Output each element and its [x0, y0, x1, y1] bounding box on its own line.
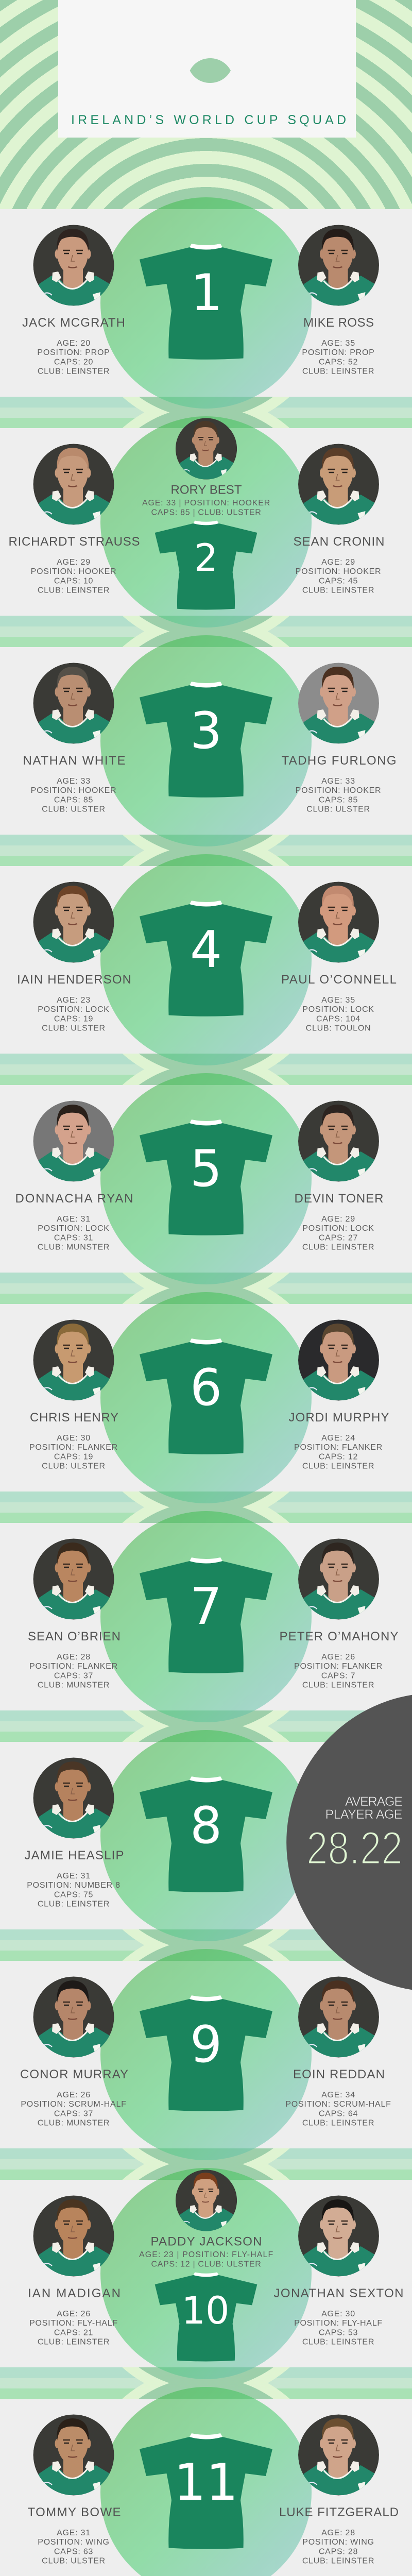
shirt — [140, 1557, 272, 1673]
player: Tommy Bowe: TOMMY BOWE — [28, 2505, 121, 2519]
player: Ian Madigan: POSITION: FLY-HALF — [29, 2319, 118, 2328]
shirt number: 5 — [190, 1140, 222, 1198]
player: Peter O'Mahony: CLUB: LEINSTER — [302, 1681, 374, 1690]
player: Conor Murray: AGE: 26 — [57, 2091, 91, 2099]
player: Richardt Strauss: AGE: 29 — [57, 558, 91, 567]
player: Rory Best: CAPS: 85 | CLUB: ULSTER — [151, 508, 262, 517]
portrait: Mike Ross — [298, 225, 379, 306]
row 6: shirt 6 — [29, 1292, 389, 1503]
player: Donnacha Ryan — [15, 1192, 133, 1252]
player: Luke Fitzgerald: LUKE FITZGERALD — [279, 2505, 399, 2519]
player: Paul O'Connell: CAPS: 104 — [316, 1015, 360, 1023]
player: Chris Henry: AGE: 30 — [57, 1434, 91, 1443]
player: Jack McGrath: CAPS: 20 — [54, 358, 93, 367]
player: Rory Best — [142, 483, 270, 517]
player: Nathan White — [23, 754, 126, 814]
player: Paddy Jackson — [139, 2235, 273, 2269]
portrait: Conor Murray — [33, 1976, 114, 2058]
player: Tommy Bowe: CAPS: 63 — [54, 2547, 93, 2556]
player: Sean O'Brien: CAPS: 37 — [54, 1671, 93, 1681]
player: Jamie Heaslip: JAMIE HEASLIP — [25, 1849, 124, 1862]
player: Jordi Murphy: AGE: 24 — [321, 1434, 355, 1443]
player: Nathan White: CLUB: ULSTER — [42, 805, 106, 814]
player: Tadhg Furlong: TADHG FURLONG — [281, 754, 397, 768]
portrait: Iain Henderson — [33, 882, 114, 962]
player: Luke Fitzgerald: CAPS: 28 — [319, 2547, 358, 2556]
player: Ian Madigan: CLUB: LEINSTER — [38, 2338, 110, 2346]
shirt number: 9 — [190, 2015, 222, 2074]
player: Jordi Murphy: CAPS: 12 — [319, 1453, 358, 1461]
player: Sean Cronin: SEAN CRONIN — [294, 535, 384, 549]
shirt number: 7 — [190, 1578, 222, 1636]
player: Mike Ross — [302, 316, 375, 376]
player: Conor Murray: POSITION: SCRUM-HALF — [21, 2100, 127, 2109]
portrait: Luke Fitzgerald — [298, 2414, 379, 2496]
portrait: Jamie Heaslip — [33, 1758, 114, 1838]
player: Jamie Heaslip: POSITION: NUMBER 8 — [27, 1881, 121, 1890]
player: Tadhg Furlong: POSITION: HOOKER — [296, 786, 381, 795]
player: Nathan White: AGE: 33 — [57, 777, 91, 786]
row 7: shirt 7 — [28, 1511, 399, 1722]
row 10: shirt 10 — [28, 2168, 404, 2379]
player: Ian Madigan: IAN MADIGAN — [28, 2286, 121, 2300]
player: Paddy Jackson: PADDY JACKSON — [150, 2235, 262, 2248]
portrait: Chris Henry — [33, 1320, 114, 1400]
portrait: Paddy Jackson — [176, 2170, 237, 2231]
player: Tadhg Furlong: CAPS: 85 — [319, 795, 358, 805]
shirt — [140, 1776, 272, 1892]
player: Iain Henderson: POSITION: LOCK — [38, 1005, 110, 1014]
shirt circle — [100, 1073, 312, 1284]
title: IRELAND’S WORLD CUP SQUAD — [71, 113, 346, 127]
player: Conor Murray: CLUB: MUNSTER — [38, 2119, 110, 2128]
player: Jamie Heaslip: CLUB: LEINSTER — [38, 1900, 110, 1908]
player: Jordi Murphy — [288, 1411, 389, 1470]
player: Luke Fitzgerald: AGE: 28 — [321, 2529, 355, 2537]
player: Jamie Heaslip: CAPS: 75 — [54, 1891, 93, 1899]
player: Jordi Murphy: CLUB: LEINSTER — [302, 1462, 374, 1470]
player: Luke Fitzgerald: POSITION: WING — [302, 2538, 374, 2547]
player: Eoin Reddan: CAPS: 64 — [319, 2109, 358, 2119]
player: Iain Henderson: IAIN HENDERSON — [17, 973, 131, 987]
player: Jordi Murphy: POSITION: FLANKER — [294, 1443, 383, 1452]
player: Chris Henry: CHRIS HENRY — [30, 1411, 118, 1425]
shirt number: 2 — [194, 536, 218, 580]
player: Paul O'Connell: CLUB: TOULON — [306, 1024, 371, 1032]
portrait: Peter O'Mahony — [298, 1538, 379, 1620]
shirt circle — [100, 197, 312, 409]
shirt circle — [100, 1292, 312, 1503]
shirt — [140, 682, 272, 798]
player: Donnacha Ryan: CAPS: 31 — [54, 1233, 93, 1243]
player: Sean O'Brien: AGE: 28 — [57, 1653, 91, 1662]
shirt — [155, 2272, 257, 2362]
shirt circle — [100, 416, 312, 628]
portrait: Donnacha Ryan — [33, 1100, 114, 1182]
shirt — [140, 2433, 272, 2549]
shirt number: 1 — [191, 264, 222, 323]
player: Paul O'Connell: POSITION: LOCK — [302, 1005, 374, 1014]
player: Richardt Strauss: RICHARDT STRAUSS — [8, 535, 140, 549]
player: Ian Madigan: CAPS: 21 — [54, 2329, 93, 2337]
player: Donnacha Ryan: AGE: 31 — [57, 1215, 91, 1224]
player: Ian Madigan: AGE: 26 — [57, 2310, 91, 2318]
player: Paddy Jackson: CAPS: 12 | CLUB: ULSTER — [151, 2260, 262, 2269]
row 4: shirt 4 — [17, 854, 397, 1065]
shirt circle — [100, 2168, 312, 2379]
player: Sean O'Brien — [28, 1630, 121, 1690]
portrait: Jordi Murphy — [298, 1320, 379, 1400]
player: Mike Ross: CAPS: 52 — [319, 358, 358, 367]
player: Nathan White: CAPS: 85 — [54, 795, 93, 805]
player: Devin Toner: CLUB: LEINSTER — [302, 1243, 374, 1252]
row 9: shirt 9 — [20, 1949, 391, 2160]
player: Tadhg Furlong — [281, 754, 397, 814]
player: Conor Murray: CONOR MURRAY — [20, 2067, 128, 2081]
player: Chris Henry — [29, 1411, 118, 1470]
player: Tadhg Furlong: CLUB: ULSTER — [306, 805, 370, 814]
player: Jack McGrath: POSITION: PROP — [37, 348, 110, 357]
title panel — [58, 0, 356, 138]
shirt — [140, 244, 272, 360]
player: Sean O'Brien: SEAN O’BRIEN — [28, 1630, 121, 1643]
portrait: Eoin Reddan — [298, 1976, 379, 2058]
player: Sean Cronin — [294, 535, 384, 595]
player: Mike Ross: MIKE ROSS — [303, 316, 374, 330]
shirt number: 4 — [190, 921, 222, 979]
portrait: Sean Cronin — [298, 444, 379, 524]
portrait: Jack McGrath — [33, 225, 114, 306]
player: Iain Henderson: AGE: 23 — [57, 996, 91, 1005]
player: Mike Ross: CLUB: LEINSTER — [302, 367, 374, 376]
player: Jamie Heaslip: AGE: 31 — [57, 1872, 91, 1880]
player: Jordi Murphy: JORDI MURPHY — [288, 1411, 389, 1425]
shirt number: 11 — [174, 2453, 238, 2512]
player: Mike Ross: POSITION: PROP — [302, 348, 375, 357]
player: Jonathan Sexton: CLUB: LEINSTER — [302, 2338, 374, 2346]
shirt number: 6 — [190, 1359, 222, 1417]
player: Tommy Bowe: CLUB: ULSTER — [42, 2556, 106, 2566]
portrait: Richardt Strauss — [33, 444, 114, 524]
player: Tommy Bowe: AGE: 31 — [57, 2529, 91, 2537]
player: Eoin Reddan: AGE: 34 — [321, 2091, 355, 2099]
player: Conor Murray — [20, 2067, 128, 2128]
shirt number: 10 — [182, 2289, 229, 2333]
player: Peter O'Mahony: CAPS: 7 — [321, 1671, 355, 1681]
player: Devin Toner: POSITION: LOCK — [302, 1224, 374, 1233]
row 1: shirt 1 — [22, 197, 379, 409]
row 2: shirt 2 — [8, 416, 384, 628]
player: Jonathan Sexton: POSITION: FLY-HALF — [294, 2319, 383, 2328]
player: Donnacha Ryan: CLUB: MUNSTER — [38, 1243, 110, 1252]
player: Jonathan Sexton — [274, 2286, 404, 2346]
player: Sean Cronin: CLUB: LEINSTER — [302, 586, 374, 595]
player: Devin Toner: DEVIN TONER — [295, 1192, 383, 1206]
player: Peter O'Mahony: AGE: 26 — [321, 1653, 355, 1662]
portrait: Paul O'Connell — [298, 882, 379, 962]
player: Eoin Reddan: CLUB: LEINSTER — [302, 2119, 374, 2128]
portrait: Jonathan Sexton — [298, 2196, 379, 2276]
portrait: Tommy Bowe — [33, 2414, 114, 2496]
player: Devin Toner: CAPS: 27 — [319, 1233, 358, 1243]
player: Sean Cronin: POSITION: HOOKER — [296, 567, 381, 576]
player: Eoin Reddan: EOIN REDDAN — [293, 2067, 385, 2081]
player: Paul O'Connell — [281, 973, 397, 1032]
top concentric rings background — [0, 0, 412, 209]
shirt circle — [100, 635, 312, 846]
row 3: shirt 3 — [23, 635, 397, 846]
player: Jonathan Sexton: CAPS: 53 — [319, 2329, 358, 2337]
player: Mike Ross: AGE: 35 — [321, 339, 355, 348]
player: Rory Best: RORY BEST — [171, 483, 242, 497]
player: Sean O'Brien: CLUB: MUNSTER — [38, 1681, 110, 1690]
shirt — [155, 520, 257, 610]
player: Conor Murray: CAPS: 37 — [54, 2109, 93, 2119]
player: Ian Madigan — [28, 2286, 121, 2346]
player: Paul O'Connell: PAUL O’CONNELL — [281, 973, 397, 987]
player: Jack McGrath: CLUB: LEINSTER — [38, 367, 110, 376]
shirt — [140, 1995, 272, 2111]
shirt — [140, 1338, 272, 1454]
shirt circle — [100, 1730, 312, 1941]
player: Sean Cronin: AGE: 29 — [321, 558, 355, 567]
player: Jack McGrath: JACK MCGRATH — [22, 316, 125, 330]
player: Nathan White: NATHAN WHITE — [23, 754, 126, 768]
shirt number: 8 — [190, 1797, 222, 1855]
player: Paddy Jackson: AGE: 23 | POSITION: FLY-HALF — [139, 2250, 273, 2259]
player: Luke Fitzgerald — [279, 2505, 399, 2566]
player: Richardt Strauss — [8, 535, 140, 595]
player: Jonathan Sexton: JONATHAN SEXTON — [274, 2286, 404, 2300]
portrait: Ian Madigan — [33, 2196, 114, 2276]
player: Iain Henderson: CLUB: ULSTER — [42, 1024, 106, 1032]
shirt circle — [100, 1949, 312, 2160]
player: Richardt Strauss: POSITION: HOOKER — [31, 567, 116, 576]
player: Jack McGrath: AGE: 20 — [57, 339, 91, 348]
player: Nathan White: POSITION: HOOKER — [31, 786, 116, 795]
player: Paul O'Connell: AGE: 35 — [321, 996, 355, 1005]
player: Chris Henry: CLUB: ULSTER — [42, 1462, 106, 1470]
player: Sean O'Brien: POSITION: FLANKER — [29, 1662, 118, 1671]
player: Tommy Bowe: POSITION: WING — [38, 2538, 110, 2547]
player: Peter O'Mahony — [279, 1630, 399, 1690]
shirt circle — [100, 854, 312, 1065]
player: Richardt Strauss: CLUB: LEINSTER — [38, 586, 110, 595]
stat heading: PLAYER AGE — [325, 1807, 403, 1822]
shirt number: 3 — [190, 702, 222, 760]
player: Donnacha Ryan: POSITION: LOCK — [38, 1224, 110, 1233]
player: Richardt Strauss: CAPS: 10 — [54, 577, 93, 585]
player: Chris Henry: POSITION: FLANKER — [29, 1443, 118, 1452]
player: Donnacha Ryan: DONNACHA RYAN — [15, 1192, 133, 1206]
stat heading — [325, 1794, 403, 1822]
row 11: shirt 11 — [28, 2387, 399, 2576]
player: Chris Henry: CAPS: 19 — [54, 1453, 93, 1461]
shirt circle — [100, 1511, 312, 1722]
row 5: shirt 5 — [15, 1073, 383, 1284]
player: Tommy Bowe — [28, 2505, 121, 2566]
player: Eoin Reddan — [285, 2067, 391, 2128]
player: Jack McGrath — [22, 316, 125, 376]
row 8: shirt 8 — [25, 1730, 312, 1941]
portrait: Nathan White — [33, 663, 114, 744]
player: Sean Cronin: CAPS: 45 — [319, 577, 358, 585]
player: Rory Best: AGE: 33 | POSITION: HOOKER — [142, 499, 270, 507]
player: Devin Toner — [295, 1192, 383, 1252]
stat circle: average player age — [286, 1695, 412, 1990]
icon: rugby ball — [190, 58, 231, 83]
player: Peter O'Mahony: PETER O’MAHONY — [279, 1630, 399, 1643]
player: Luke Fitzgerald: CLUB: LEINSTER — [302, 2556, 374, 2566]
shirt — [140, 901, 272, 1016]
player: Peter O'Mahony: POSITION: FLANKER — [294, 1662, 383, 1671]
player: Iain Henderson: CAPS: 19 — [54, 1015, 93, 1023]
portrait: Tadhg Furlong — [298, 663, 379, 744]
shirt circle — [100, 2387, 312, 2576]
shirt — [140, 1120, 272, 1235]
player: Jamie Heaslip — [25, 1849, 124, 1908]
stat heading: AVERAGE — [345, 1794, 403, 1809]
player: Tadhg Furlong: AGE: 33 — [321, 777, 355, 786]
portrait: Rory Best — [176, 418, 237, 480]
player: Jonathan Sexton: AGE: 30 — [321, 2310, 355, 2318]
player: Devin Toner: AGE: 29 — [321, 1215, 355, 1224]
portrait: Sean O'Brien — [33, 1538, 114, 1620]
player: Iain Henderson — [17, 973, 131, 1032]
portrait: Devin Toner — [298, 1100, 379, 1182]
player: Eoin Reddan: POSITION: SCRUM-HALF — [285, 2100, 391, 2109]
